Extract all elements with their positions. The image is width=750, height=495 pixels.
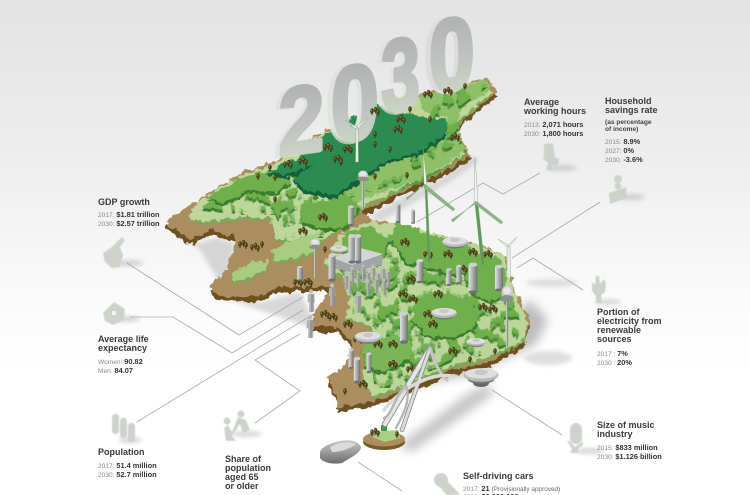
turbine	[345, 117, 368, 162]
label: population: 2017: 51.4 million	[98, 461, 157, 470]
title: 2030	[274, 0, 475, 178]
label: share of population aged 65 or older: population	[225, 463, 271, 473]
label: average life expectancy: Average life	[98, 334, 149, 344]
label: share of population aged 65 or older: or older	[225, 481, 259, 491]
label: household savings rate: 2027: 0%	[605, 146, 634, 155]
label: renewable electricity	[597, 307, 662, 367]
label: renewable electricity: electricity from	[597, 316, 662, 326]
title: 2030: 3	[377, 16, 418, 135]
label: household savings rate: savings rate	[605, 105, 658, 115]
label: renewable electricity: sources	[597, 334, 632, 344]
label: average working hours	[523, 97, 586, 138]
label: self-driving cars	[463, 471, 560, 495]
label: share of population aged 65 or older	[225, 454, 271, 491]
label: household savings rate: of income)	[605, 126, 638, 133]
label: average life expectancy: expectancy	[98, 343, 147, 353]
icon: microphone	[567, 423, 604, 454]
label: renewable electricity: 2017 : 7%	[597, 349, 628, 358]
mid green terrain	[207, 170, 508, 375]
label: share of population aged 65 or older: aged 65	[225, 472, 259, 482]
label: population	[98, 447, 157, 479]
icon: gdp growth	[103, 237, 144, 268]
buildings	[297, 202, 503, 383]
title: 2030: 0	[326, 42, 376, 166]
icon: household savings	[609, 175, 645, 204]
statues of people	[306, 264, 391, 338]
large dome at south coast	[463, 368, 499, 387]
islands	[363, 425, 405, 450]
label: renewable electricity: 2030 : 20%	[597, 358, 632, 367]
label: household savings rate: Household	[605, 96, 652, 106]
title: 2030: 2	[278, 64, 325, 177]
label: size of music industry: Size of music	[597, 420, 655, 430]
trees	[238, 83, 498, 438]
turbine	[451, 157, 503, 265]
icon: steering key	[434, 473, 460, 495]
label: gdp growth: 2017: $1.81 trillion	[98, 210, 160, 219]
turbine	[406, 148, 455, 263]
label: renewable electricity: Portion of	[597, 307, 640, 317]
title: 2030: 3	[381, 16, 420, 134]
label: average life expectancy	[98, 334, 149, 375]
label: average life expectancy: Men: 84.07	[98, 366, 133, 375]
label: size of music industry: 2015: $833 million	[597, 443, 658, 452]
label: gdp growth: 2030: $2.57 trillion	[98, 219, 160, 228]
title: 2030: 0	[331, 42, 379, 165]
label: household savings rate: (as percentage	[605, 119, 652, 126]
land base	[165, 78, 530, 412]
title: 2030: 2	[274, 63, 323, 178]
label: size of music industry: industry	[597, 429, 633, 439]
label: gdp growth	[98, 197, 160, 228]
label: size of music industry: 2030: $1.126 billion	[597, 452, 662, 461]
label: population: Population	[98, 447, 144, 457]
label: size of music industry	[597, 420, 662, 461]
icon: working hours chair	[543, 143, 577, 171]
map of Korean peninsula	[165, 78, 530, 450]
label: average working hours: working hours	[523, 106, 586, 116]
label: household savings rate: 2030: -3.6%	[605, 155, 643, 164]
bridge	[384, 348, 452, 430]
label: household savings rate	[605, 96, 658, 164]
icon: share of aged population	[224, 410, 262, 441]
light green terrain	[188, 80, 528, 399]
map shadows	[170, 157, 578, 452]
icon: renewable electricity	[592, 276, 621, 304]
label: gdp growth: GDP growth	[98, 197, 150, 207]
label: average working hours: Average	[524, 97, 559, 107]
label: average working hours: 2013: 2,071 hours	[524, 120, 583, 129]
connector lines	[127, 173, 600, 491]
icon: population	[112, 414, 142, 443]
turbine	[498, 237, 517, 278]
label: self-driving cars: 2017: 21 (Provisionally approved)	[463, 484, 560, 493]
icon: life expectancy	[103, 302, 140, 325]
wind turbines	[345, 117, 517, 278]
water towers	[309, 170, 514, 346]
label: renewable electricity: renewable	[597, 325, 641, 335]
self-driving car	[320, 440, 361, 464]
domes	[354, 237, 499, 387]
label: share of population aged 65 or older: Share of	[225, 454, 262, 464]
label: average working hours: 2030: 1,800 hours	[524, 129, 583, 138]
scattered mid green patches	[200, 84, 522, 388]
label: self-driving cars: Self-driving cars	[463, 471, 534, 481]
central city complex	[330, 234, 383, 272]
dark green northern terrain	[267, 103, 447, 199]
label: household savings rate: 2015: 8.9%	[605, 137, 641, 146]
label: average life expectancy: Women: 90.82	[98, 357, 143, 366]
label: population: 2030: 52.7 million	[98, 470, 157, 479]
